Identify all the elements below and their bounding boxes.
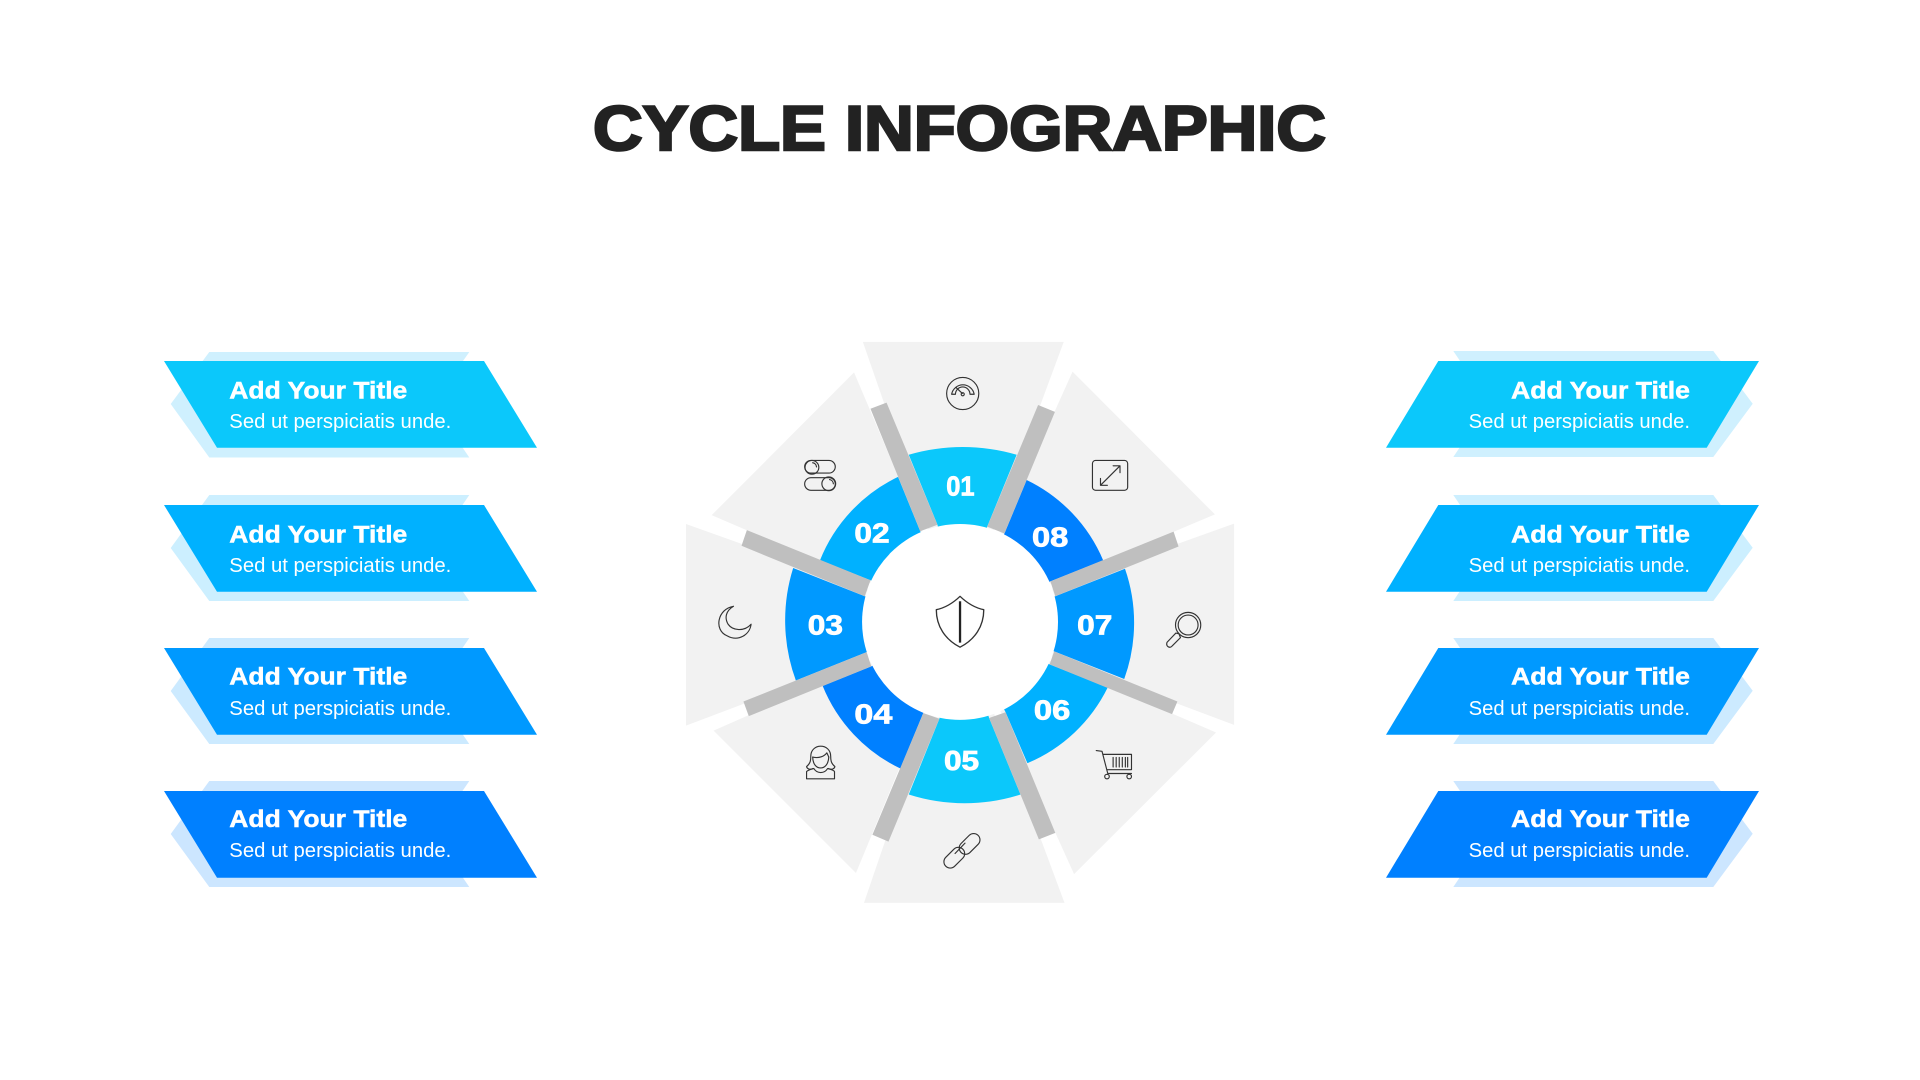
centre circle xyxy=(862,524,1058,720)
card: left 4: Sed ut perspiciatis unde. xyxy=(229,840,451,862)
icon: toggles xyxy=(805,460,836,491)
card: left 3: Sed ut perspiciatis unde. xyxy=(229,698,451,720)
ring sectors xyxy=(785,447,1134,803)
card: left 4: Add Your Title xyxy=(229,806,407,833)
card: right 2 xyxy=(1386,495,1759,601)
card: left 1: Add Your Title xyxy=(229,378,407,404)
panel: left cards xyxy=(164,352,537,887)
card: right 4: Add Your Title xyxy=(1511,806,1690,833)
card: right 1 xyxy=(1386,351,1759,457)
card: right 3: Sed ut perspiciatis unde. xyxy=(1469,698,1690,720)
card: right 4: Sed ut perspiciatis unde. xyxy=(1469,840,1690,862)
icon: chain link xyxy=(941,831,983,871)
panel: right cards xyxy=(1386,351,1759,887)
card: right 1: Add Your Title xyxy=(1511,378,1690,404)
step numbers: 06 xyxy=(1034,695,1070,726)
icon: gauge xyxy=(947,377,979,410)
card: right 2: Add Your Title xyxy=(1511,522,1690,548)
card: left 1: Sed ut perspiciatis unde. xyxy=(229,411,451,433)
grey divider spokes xyxy=(742,403,1179,842)
step numbers: 02 xyxy=(854,518,890,549)
icon: resize arrow xyxy=(1092,460,1128,490)
card: left 4 xyxy=(164,781,537,887)
step numbers xyxy=(808,470,1112,776)
card: right 3 xyxy=(1386,638,1759,744)
card: left 1 xyxy=(164,352,537,458)
outer grey wedges xyxy=(686,342,1234,903)
icon: shopping cart xyxy=(1096,751,1131,779)
card: left 2: Sed ut perspiciatis unde. xyxy=(229,555,451,577)
icon: magnifier xyxy=(1167,612,1201,647)
card: left 3: Add Your Title xyxy=(229,664,407,690)
card: right 2: Sed ut perspiciatis unde. xyxy=(1469,555,1690,577)
icon: person xyxy=(807,746,835,779)
step numbers: 05 xyxy=(944,745,979,776)
step numbers: 03 xyxy=(808,610,843,641)
card: left 2: Add Your Title xyxy=(229,522,407,548)
step numbers: 04 xyxy=(854,699,893,730)
icon: moon xyxy=(719,606,751,638)
card: left 2 xyxy=(164,495,537,601)
cycle wheel xyxy=(686,342,1234,903)
card: right 3: Add Your Title xyxy=(1511,664,1690,690)
card: right 4 xyxy=(1386,781,1759,887)
icon: shield xyxy=(936,596,984,647)
title: CYCLE INFOGRAPHIC xyxy=(593,94,1326,164)
step numbers: 08 xyxy=(1032,522,1068,553)
step numbers: 07 xyxy=(1077,610,1112,641)
step numbers: 01 xyxy=(946,470,975,501)
card: left 3 xyxy=(164,638,537,744)
card: right 1: Sed ut perspiciatis unde. xyxy=(1469,411,1690,433)
